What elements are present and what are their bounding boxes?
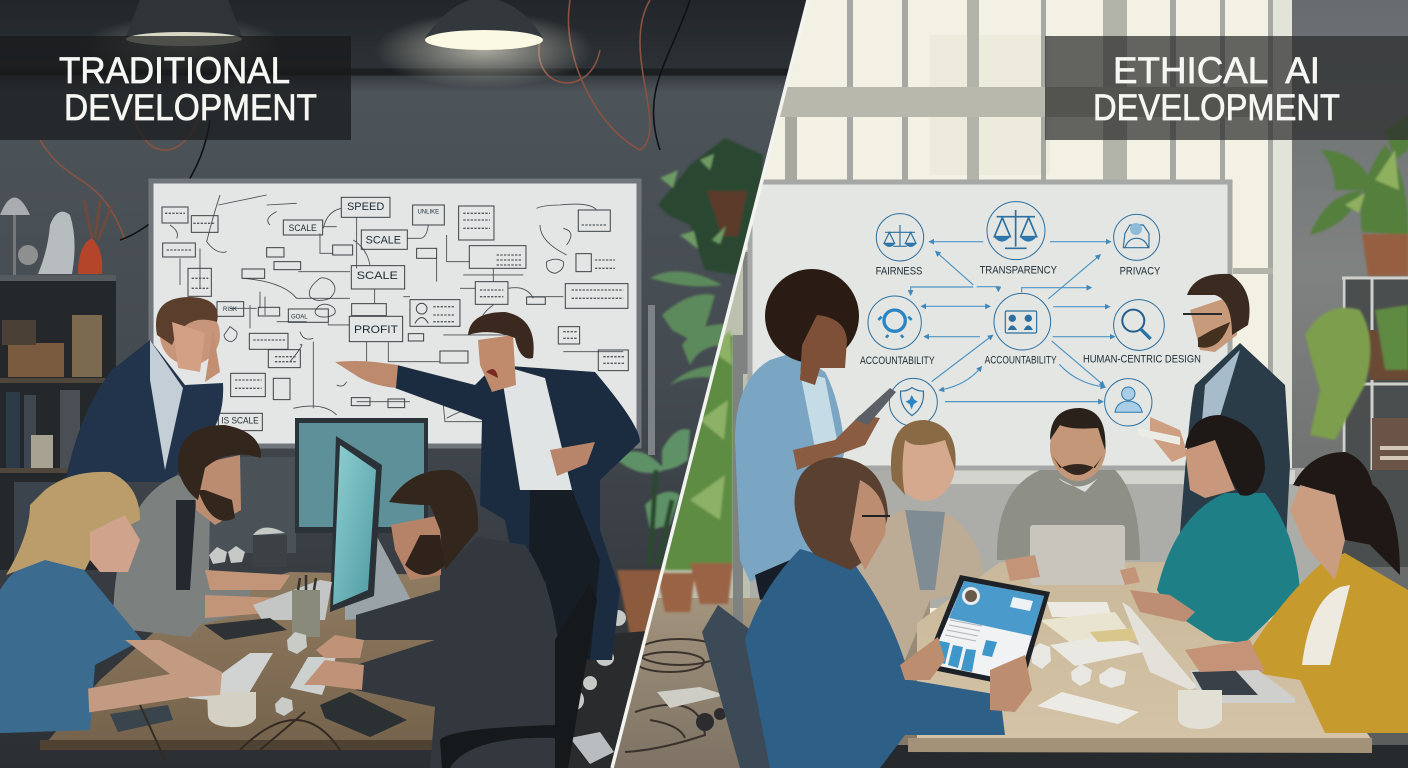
panel: traditional development scene — [0, 0, 820, 768]
whiteboard: right, ethical AI principles diagram — [750, 182, 1230, 468]
heading: traditional development: DEVELOPMENT — [64, 87, 317, 128]
large potted plant upper right — [1310, 115, 1408, 276]
whiteboard person icon — [415, 303, 428, 323]
area beside whiteboard, behind plant — [657, 250, 750, 598]
lamp right — [374, 0, 594, 88]
laptop on table — [1005, 525, 1140, 585]
front monitor — [330, 436, 411, 620]
flowchart boxes — [162, 197, 628, 431]
heading: traditional development — [0, 36, 351, 140]
person: man in dark hoodie — [304, 470, 561, 768]
node: human-centric design — [1083, 300, 1201, 365]
table: left wooden desk — [40, 572, 450, 750]
flowchart connector lines — [170, 195, 623, 422]
divider line between scenes — [612, 0, 808, 768]
whiteboard: left, chaotic flowchart — [151, 181, 639, 446]
plants behind pointing man — [615, 138, 763, 638]
back monitor — [295, 418, 428, 533]
person: angry man pointing — [335, 312, 640, 660]
pillar and right wall — [1273, 0, 1293, 470]
floor cables — [625, 638, 710, 753]
person: woman with afro and tablet — [735, 269, 896, 600]
node: accountability left: ACCOUNTABILITY — [860, 355, 935, 367]
ceiling pipes and tangled cables — [0, 0, 810, 240]
person: woman with blonde ponytail — [0, 472, 222, 733]
whiteboard: left, chaotic flowchart: SCALE — [357, 270, 398, 282]
back wall patch behind monitors — [209, 457, 296, 553]
panel: ethical AI development scene — [600, 0, 1408, 768]
hands holding tablet — [900, 637, 1032, 712]
node: accountability centre: ACCOUNTABILITY — [985, 354, 1057, 366]
table: right meeting table — [908, 562, 1372, 753]
coffee mug — [1178, 690, 1222, 729]
scribbled notes inside boxes — [165, 213, 625, 388]
whiteboard keywords: SPEED — [347, 201, 384, 213]
heading: ethical AI development — [1045, 36, 1408, 140]
whiteboard: left, chaotic flowchart: UNLIKE — [417, 209, 439, 215]
node: shield — [889, 378, 937, 426]
wall stand pole by whiteboard — [648, 305, 655, 455]
table front edge — [40, 740, 433, 750]
person: bearded man typing — [113, 425, 290, 637]
laptop and chair wheels on floor — [657, 687, 726, 731]
plant and pots at divider — [657, 330, 733, 612]
metal shelf with plant and books, right — [1305, 277, 1408, 567]
office chair foreground — [702, 605, 797, 768]
back wall and ceiling — [0, 0, 806, 662]
papers on table — [1031, 602, 1153, 724]
lamp left — [100, 0, 266, 62]
node: privacy: PRIVACY — [1120, 265, 1161, 277]
person: man in blue shirt from behind — [745, 457, 1005, 768]
person: woman in beige cardigan — [855, 420, 985, 660]
person: man with glasses standing — [1137, 274, 1290, 560]
whiteboard: left, chaotic flowchart: PROFIT — [354, 324, 398, 336]
heading: ethical AI development: DEVELOPMENT — [1093, 87, 1340, 128]
dark floor under right table — [880, 745, 1408, 768]
bright window background — [746, 0, 1276, 622]
floor debris: crumpled paper and cables — [572, 610, 646, 764]
person: woman in teal cardigan — [1130, 415, 1300, 643]
whiteboard: left, chaotic flowchart: RISK — [223, 307, 237, 313]
node: fairness — [876, 214, 924, 277]
node: human user — [1105, 379, 1152, 426]
node: fairness: FAIRNESS — [876, 265, 922, 277]
floor — [600, 598, 930, 768]
desk clutter: keyboards, notebook, pen mug, mug, phone, papers — [110, 575, 407, 760]
window frames — [780, 0, 1273, 374]
lower wall beneath whiteboard — [750, 468, 1340, 608]
heading: ethical AI development: ETHICAL AI — [1113, 50, 1320, 91]
node: accountability centre — [985, 293, 1057, 366]
open laptop right — [1122, 602, 1295, 703]
heading: traditional development: TRADITIONAL — [59, 50, 290, 91]
person: woman in yellow cardigan — [1185, 452, 1408, 733]
shelf with clutter — [0, 198, 116, 570]
node: human-centric design: HUMAN-CENTRIC DESIGN — [1083, 353, 1201, 365]
metal stand pole — [733, 252, 749, 626]
tablet showing dashboard — [923, 575, 1050, 688]
person: man in gray sweater — [997, 408, 1140, 560]
office chair — [440, 583, 597, 768]
whiteboard: left, chaotic flowchart: SCALE — [366, 234, 401, 246]
trash bin with crumpled paper — [209, 527, 287, 567]
whiteboard: left, chaotic flowchart: SCALE — [289, 223, 317, 233]
node: transparency: TRANSPARENCY — [980, 265, 1058, 277]
faint building seen through window — [930, 35, 1050, 175]
whiteboard: left, chaotic flowchart: GOAL — [291, 314, 308, 320]
whiteboard: left, chaotic flowchart: IS SCALE — [221, 415, 259, 425]
person: stressed man holding head — [65, 297, 223, 482]
node: accountability left — [860, 296, 935, 367]
node: privacy — [1114, 214, 1161, 277]
connector arrows — [911, 242, 1113, 402]
node: transparency — [980, 202, 1058, 277]
